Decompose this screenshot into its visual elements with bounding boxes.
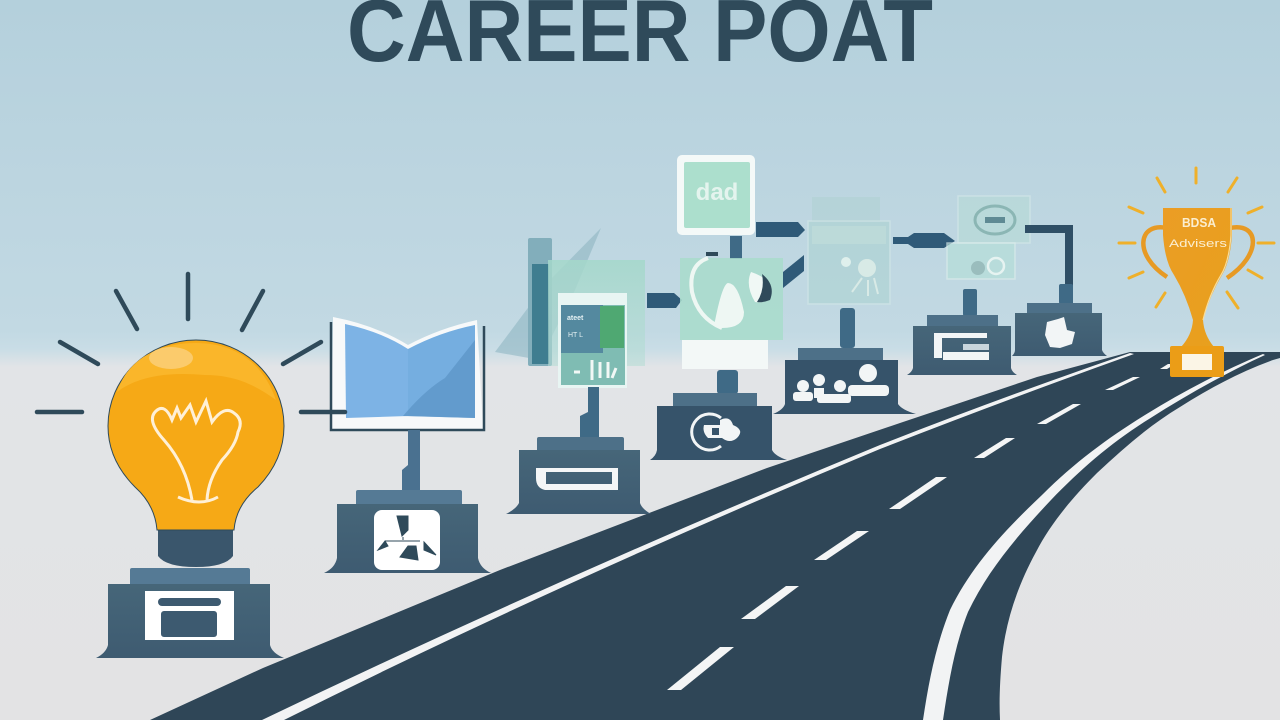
step 1: idea bulb on pedestal xyxy=(37,274,345,658)
bulb glass xyxy=(108,340,284,530)
pedestal 4 icon xyxy=(692,414,740,450)
pedestal 3 icon xyxy=(536,468,618,490)
step 2: open book on pedestal xyxy=(324,317,491,573)
book stem xyxy=(402,430,420,490)
trophy handles xyxy=(1143,227,1253,278)
trophy rim highlight xyxy=(1203,208,1231,320)
book frame xyxy=(331,322,484,430)
front card: ateet xyxy=(567,315,584,322)
stem 3 xyxy=(580,387,599,438)
pedestal 1 icon xyxy=(145,591,234,640)
dark teal sheet xyxy=(528,238,552,366)
pedestal 7 xyxy=(1027,303,1092,316)
step 3: translucent document panels on pedestal xyxy=(495,228,651,514)
book white backing xyxy=(332,317,483,429)
pedestal 2 icon xyxy=(374,510,440,570)
bulb highlight xyxy=(149,347,193,369)
pedestal 2 xyxy=(324,490,491,573)
headset icon xyxy=(691,254,772,328)
front card: HT L xyxy=(568,332,583,339)
pedestal 6 icon xyxy=(934,333,989,360)
connector arrow 5 to 6 xyxy=(893,233,955,248)
trophy base xyxy=(1170,346,1224,377)
trophy text top: BDSA xyxy=(1182,215,1217,230)
stem 4 xyxy=(717,370,738,394)
dad card: dad xyxy=(696,179,738,206)
mint panel xyxy=(548,260,645,366)
step 4: headset panel with dad card xyxy=(650,155,805,460)
bulb base xyxy=(158,528,233,567)
stem 6 xyxy=(963,289,977,316)
step 5: team panel on pedestal xyxy=(773,197,916,414)
road: left edge line xyxy=(262,353,1134,720)
book blue right page xyxy=(408,325,475,418)
goal: gold trophy xyxy=(1119,168,1274,377)
pedestal 4 xyxy=(650,393,787,460)
trophy text bottom: Advisers xyxy=(1169,238,1228,250)
pedestal 1 xyxy=(96,568,284,658)
road xyxy=(150,352,1280,720)
stem 5 xyxy=(840,308,855,348)
white monitor base xyxy=(682,340,768,369)
trophy plate xyxy=(1182,354,1212,370)
dad card xyxy=(677,155,755,235)
road: right edge line xyxy=(923,354,1265,720)
pedestal 5 people icon xyxy=(793,364,889,403)
slanted connector xyxy=(783,255,804,288)
trophy cup and stem xyxy=(1163,208,1232,347)
stem from card xyxy=(730,236,742,259)
translucent upper card xyxy=(958,196,1030,243)
translucent wing xyxy=(495,228,601,360)
road: centre dashes xyxy=(667,364,1175,690)
pedestal 3 xyxy=(506,437,651,514)
mint headset panel xyxy=(680,258,783,340)
filament xyxy=(152,401,240,502)
bulb rays xyxy=(37,274,345,412)
front card xyxy=(558,293,627,388)
translucent lower card xyxy=(947,243,1015,279)
connector arrow 3 to 4 xyxy=(647,293,682,308)
arrow to step 5 xyxy=(756,222,805,237)
bulb upper sheen xyxy=(117,343,276,400)
trophy rays xyxy=(1119,168,1274,308)
pedestal 5 xyxy=(773,348,916,414)
translucent tool panel xyxy=(808,197,890,304)
pedestal 6 xyxy=(907,315,1017,375)
pedestal 7 icon xyxy=(1045,317,1075,348)
book blue left page xyxy=(345,324,408,418)
elbow connector xyxy=(1025,229,1069,303)
step 6: teal panel on pedestal xyxy=(907,196,1030,375)
step 7: elbow connector and pedestal xyxy=(1012,229,1107,356)
